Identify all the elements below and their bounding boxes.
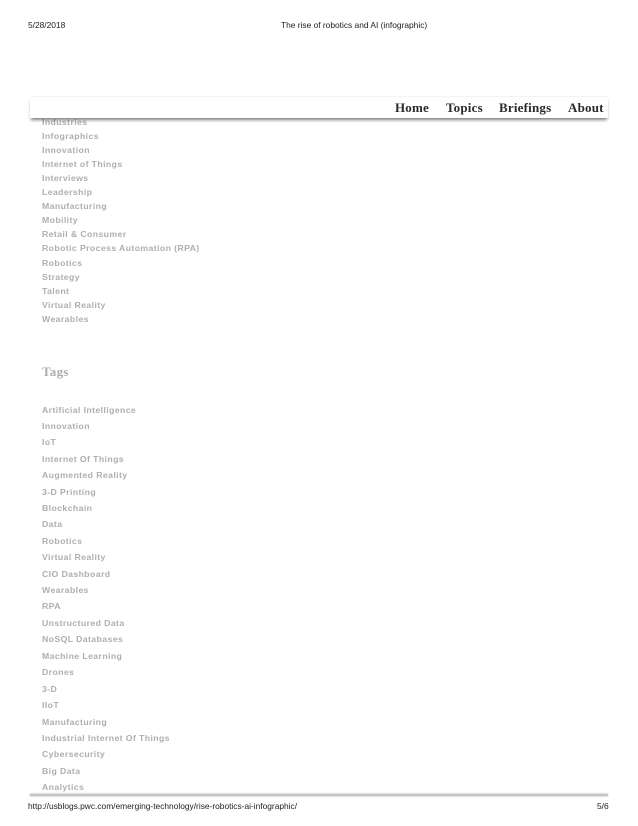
panel: sidebar categories list: Retail & Consumer	[42, 229, 127, 239]
panel: tags list: Cybersecurity	[42, 749, 105, 759]
panel: tags list: Industrial Internet Of Things	[42, 733, 170, 743]
panel: tags list: Machine Learning	[42, 651, 122, 661]
panel: tags list: Big Data	[42, 766, 80, 776]
panel: sidebar categories list: Internet of Things	[42, 159, 123, 169]
panel: tags list: Unstructured Data	[42, 618, 125, 628]
panel: tags list: IoT	[42, 437, 56, 447]
panel: tags list: NoSQL Databases	[42, 634, 123, 644]
print footer: page number: 5/6	[597, 801, 609, 811]
nav link: Briefings: Briefings	[499, 100, 551, 115]
panel: tags list: IIoT	[42, 700, 59, 710]
panel: tags list: Augmented Reality	[42, 470, 127, 480]
panel: tags list: 3-D Printing	[42, 487, 96, 497]
panel: tags list: Virtual Reality	[42, 552, 106, 562]
panel: tags list: RPA	[42, 601, 61, 611]
navigation bar	[30, 96, 608, 118]
panel: sidebar categories list: Interviews	[42, 173, 88, 183]
nav link: Topics: Topics	[446, 100, 483, 115]
panel: tags list: Blockchain	[42, 503, 92, 513]
panel: tags list: 3-D	[42, 684, 57, 694]
panel: tags list: Internet Of Things	[42, 454, 124, 464]
panel: sidebar categories list: Strategy	[42, 272, 80, 282]
panel: tags list: Drones	[42, 667, 74, 677]
panel: sidebar categories list: Mobility	[42, 215, 78, 225]
panel: sidebar categories list: Industries	[42, 117, 88, 127]
print footer: URL: http://usblogs.pwc.com/emerging-technology/rise-robotics-ai-infographic/	[28, 801, 297, 811]
print header: page title: The rise of robotics and AI (infographic)	[281, 20, 427, 30]
nav link: Home: Home	[395, 100, 429, 115]
panel: sidebar categories list: Virtual Reality	[42, 300, 106, 310]
panel: sidebar categories list	[42, 117, 200, 324]
panel: tags list: Artificial Intelligence	[42, 405, 136, 415]
panel: sidebar categories list: Robotics	[42, 258, 82, 268]
panel: sidebar categories list: Leadership	[42, 187, 92, 197]
print header: date: 5/28/2018	[28, 20, 65, 30]
panel: sidebar categories list: Innovation	[42, 145, 90, 155]
panel: tags list: Wearables	[42, 585, 89, 595]
panel: tags list: Robotics	[42, 536, 82, 546]
panel: tags list: CIO Dashboard	[42, 569, 110, 579]
panel: sidebar categories list: Infographics	[42, 131, 99, 141]
panel: sidebar categories list: Manufacturing	[42, 201, 107, 211]
panel: sidebar categories list: Robotic Process Automation (RPA)	[42, 243, 200, 253]
panel: tags list: Analytics	[42, 782, 84, 792]
panel: tags list	[42, 405, 170, 792]
panel: sidebar categories list: Wearables	[42, 314, 89, 324]
nav link: About: About	[568, 100, 604, 115]
panel: tags list: Data	[42, 519, 62, 529]
panel: tags list: Innovation	[42, 421, 90, 431]
heading: Tags: Tags	[42, 364, 69, 379]
panel: tags list: Manufacturing	[42, 717, 107, 727]
panel: sidebar categories list: Talent	[42, 286, 69, 296]
